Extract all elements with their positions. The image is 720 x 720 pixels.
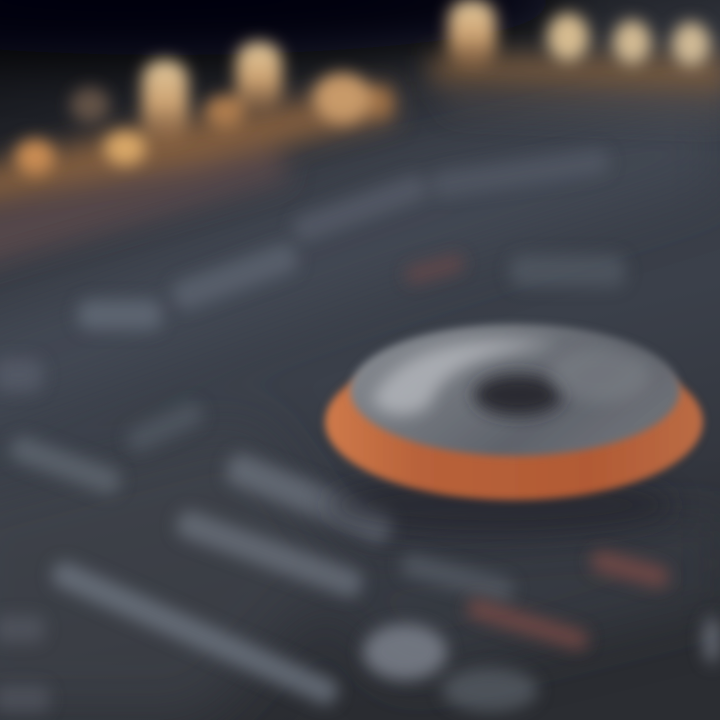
- orange chart band: left: [0, 85, 395, 270]
- disc dark hub: [474, 374, 562, 416]
- top-left dark corner: [0, 0, 570, 55]
- disc highlight: [372, 340, 560, 415]
- disc grey top: [350, 324, 680, 456]
- red accent streaks: [403, 253, 671, 652]
- orange chart band: right: [430, 55, 720, 122]
- disc sheen: [550, 347, 650, 403]
- blurred text streaks: upper: [0, 148, 625, 455]
- disc shadow: [325, 475, 675, 535]
- disc orange rim: [325, 344, 703, 500]
- glowing bars: right group: [448, 0, 710, 68]
- disc: [325, 324, 703, 535]
- blurred blob: bottom centre: [363, 616, 720, 712]
- glowing bars: left group: [15, 42, 391, 175]
- blurred text streaks: lower: [0, 433, 516, 713]
